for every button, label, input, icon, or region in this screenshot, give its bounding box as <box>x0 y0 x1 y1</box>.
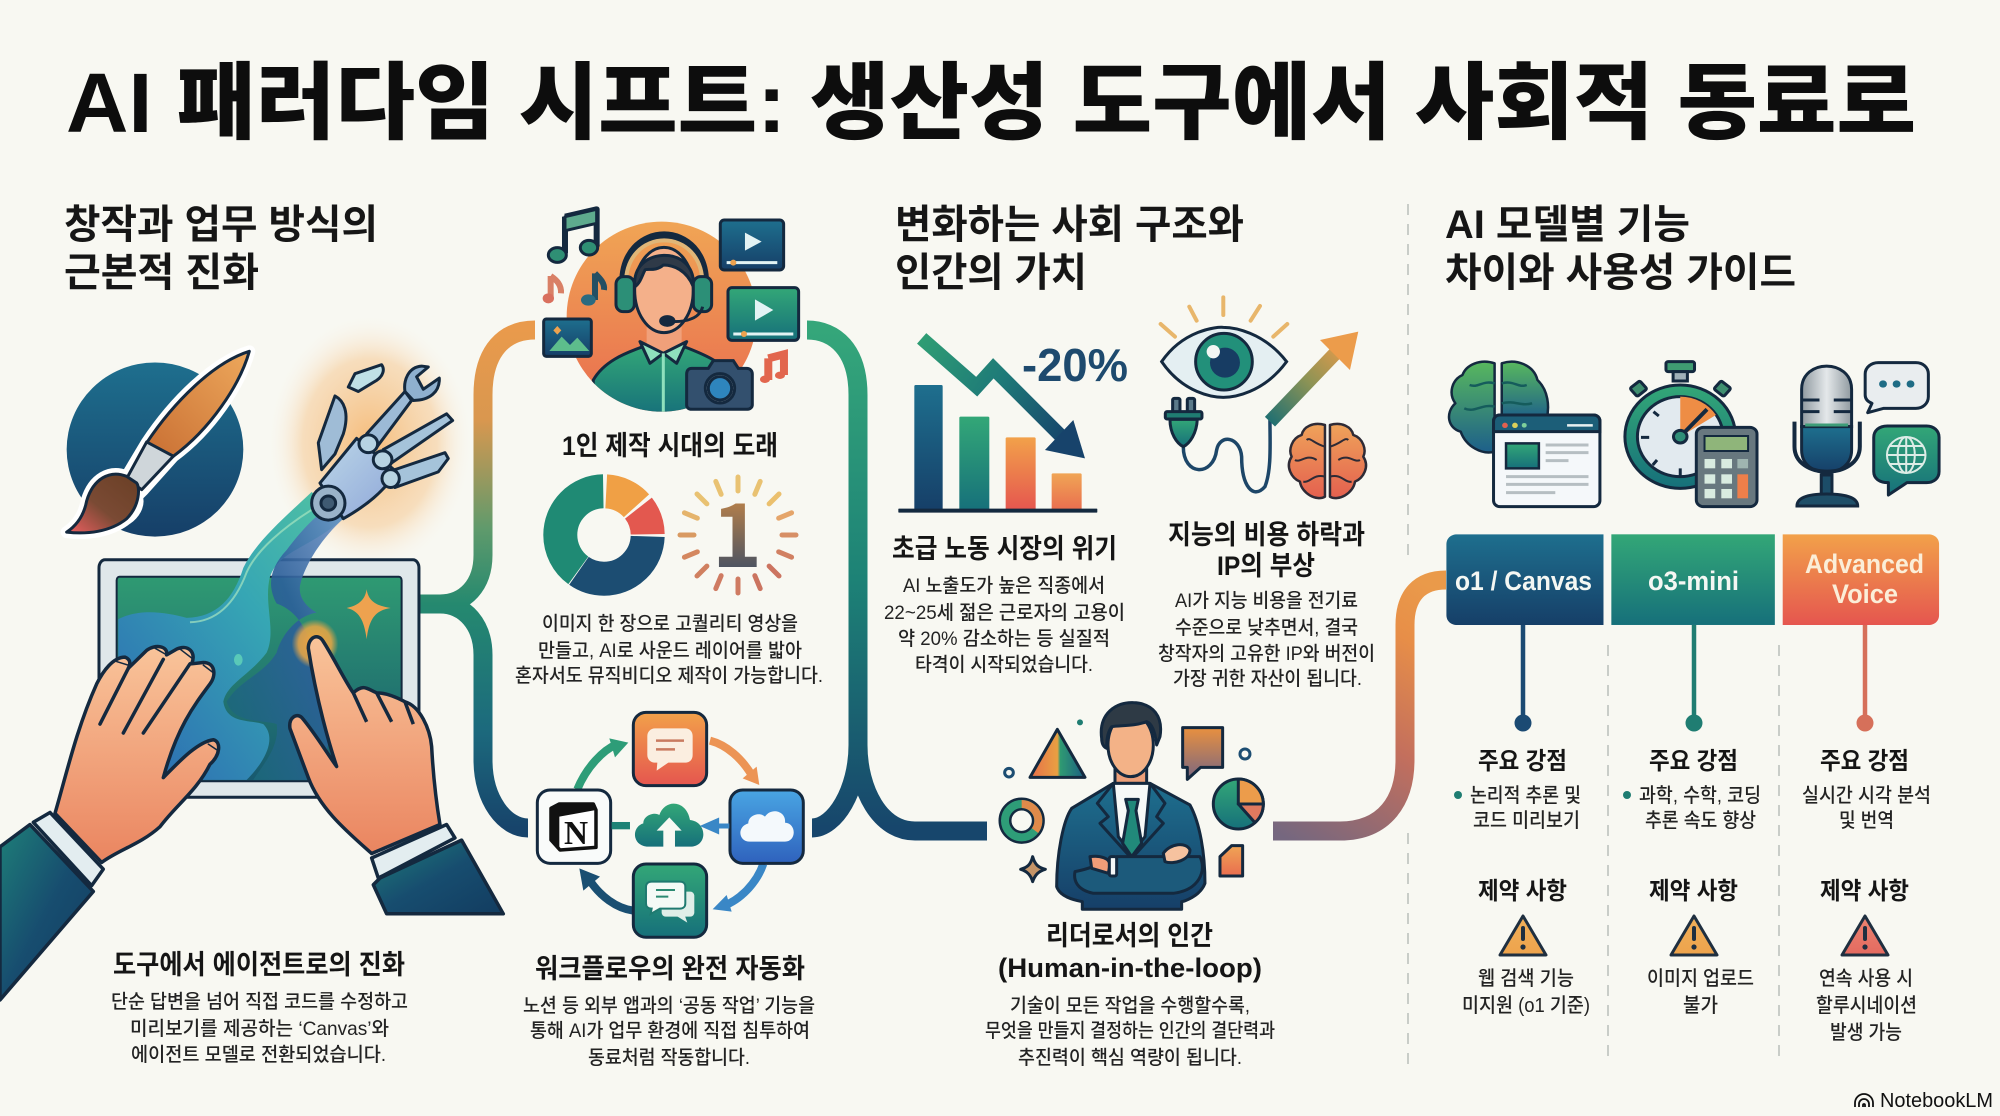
body text <box>985 995 1275 1069</box>
picture tile <box>544 319 591 356</box>
icon: green brain and browser window <box>1449 362 1600 507</box>
diamond <box>1021 857 1045 882</box>
body text: 기술이 모든 작업을 수행할수록, <box>1010 995 1250 1017</box>
strengths text <box>1802 784 1931 832</box>
subheading: 초급 노동 시장의 위기 <box>892 534 1117 564</box>
body text: solo creator <box>515 613 823 687</box>
body text: 단순 답변을 넘어 직접 코드를 수정하고 <box>111 991 408 1013</box>
limits text: 불가 <box>1683 994 1718 1017</box>
man <box>1057 703 1205 909</box>
limits text: 이미지 업로드 <box>1647 967 1754 990</box>
glow behind robot hand <box>267 313 473 572</box>
touch glow <box>292 619 338 668</box>
o1 canvas box <box>1446 534 1603 625</box>
limits text <box>1462 967 1590 1017</box>
body text: 22~25세 젊은 근로자의 고용이 <box>884 602 1125 624</box>
notebooklm logo: NotebookLM <box>1880 1090 1993 1112</box>
tablet <box>99 560 419 797</box>
left hand <box>0 647 219 1000</box>
heading: creation and work: 창작과 업무 방식의 <box>64 203 378 247</box>
illustration: human leader <box>1005 703 1263 909</box>
body text: 가장 귀한 자산이 됩니다. <box>1173 668 1362 690</box>
limits text: 미지원 (o1 기준) <box>1462 994 1590 1017</box>
icons and model header row <box>1446 362 1939 625</box>
subheading: 도구에서 에이전트로의 진화 <box>113 950 405 980</box>
strengths text: 및 번역 <box>1839 809 1894 832</box>
minus twenty percent: -20% <box>1022 339 1128 391</box>
subheading: 워크플로우의 완전 자동화 <box>535 954 805 984</box>
advanced voice box <box>1783 534 1939 625</box>
right hand <box>290 637 503 914</box>
number one burst <box>680 467 796 593</box>
strengths text: 과학, 수학, 코딩 <box>1639 784 1761 807</box>
heading: model guide: 차이와 사용성 가이드 <box>1445 251 1796 295</box>
falling arrow <box>922 338 1062 437</box>
body text: solo creator: 만들고, AI로 사운드 레이어를 밟아 <box>538 640 802 662</box>
triangle <box>1030 729 1085 777</box>
subheading <box>998 921 1262 983</box>
icon: microphone with speech bubbles <box>1794 363 1939 506</box>
ring <box>1005 804 1038 837</box>
body text: 동료처럼 작동합니다. <box>588 1047 750 1069</box>
tag shape <box>1220 846 1243 876</box>
body text: AI 노출도가 높은 직종에서 <box>903 575 1105 597</box>
column: o1 canvas <box>1454 748 1590 1017</box>
subheading: (Human-in-the-loop) <box>998 953 1262 983</box>
strengths text: 논리적 추론 및 <box>1470 784 1581 807</box>
strengths text <box>1639 784 1761 832</box>
body text <box>884 575 1125 676</box>
text: entry level job crisis <box>884 534 1125 676</box>
cable and growth arrow <box>1183 420 1270 492</box>
orange circle <box>567 222 757 412</box>
label: advanced voice: Advanced <box>1805 549 1924 579</box>
flow connectors <box>418 330 1446 831</box>
label: advanced voice <box>1805 549 1924 609</box>
stems and dots <box>1514 625 1874 732</box>
body text: AI가 지능 비용을 전기료 <box>1175 590 1358 612</box>
strengths heading: 주요 강점 <box>1649 748 1738 775</box>
messages tile <box>633 864 707 937</box>
limits heading: 제약 사항 <box>1649 878 1738 905</box>
arrow from cloud tile <box>706 821 729 831</box>
body text: 통해 AI가 업무 환경에 직접 침투하여 <box>530 1020 810 1042</box>
body text <box>111 991 408 1066</box>
brain <box>1289 424 1366 498</box>
icon: blue circle <box>67 362 243 537</box>
center cloud upload <box>635 804 703 847</box>
notion tile <box>537 790 611 863</box>
strengths text: 실시간 시각 분석 <box>1802 784 1931 807</box>
body text: 창작자의 고유한 IP와 버전이 <box>1158 643 1375 665</box>
subheading <box>1168 520 1365 581</box>
body text: solo creator: 혼자서도 뮤직비디오 제작이 가능합니다. <box>515 665 823 687</box>
o3-mini box <box>1611 534 1775 625</box>
heading: model guide <box>1445 203 1796 295</box>
person <box>592 326 716 412</box>
music notes <box>548 209 598 262</box>
illustration: brush, robot hand, tablet <box>0 313 503 1000</box>
notion tile: N <box>564 815 588 852</box>
camera <box>687 361 752 409</box>
rays <box>1161 297 1287 337</box>
star <box>347 589 391 639</box>
subheading: IP의 부상 <box>1217 551 1315 581</box>
subheading: 지능의 비용 하락과 <box>1168 520 1365 550</box>
title: AI 패러다임 시프트: 생산성 도구에서 사회적 동료로 <box>66 56 1916 150</box>
limits text: 웹 검색 기능 <box>1478 967 1574 990</box>
limits text: 연속 사용 시 <box>1819 967 1913 990</box>
bullet <box>1454 791 1462 799</box>
number one burst: 1 <box>712 467 762 592</box>
limits text: 발생 가능 <box>1830 1021 1902 1044</box>
bar chart with falling arrow <box>898 338 1097 513</box>
plug <box>1165 398 1202 447</box>
chat tile <box>633 712 707 786</box>
pie chart <box>1213 779 1263 829</box>
strengths text: 코드 미리보기 <box>1473 809 1580 832</box>
body text <box>1158 590 1375 690</box>
limits heading: 제약 사항 <box>1820 878 1909 905</box>
heading: social change: 변화하는 사회 구조와 <box>895 203 1244 247</box>
body text: 미리보기를 제공하는 ‘Canvas’와 <box>130 1018 389 1040</box>
limits heading: 제약 사항 <box>1478 878 1567 905</box>
speech square <box>1183 728 1223 779</box>
video tile 1 <box>720 220 784 270</box>
strengths text <box>1470 784 1581 832</box>
body text: 추진력이 핵심 역량이 됩니다. <box>1018 1047 1242 1069</box>
label: o1 canvas: o1 / Canvas <box>1455 566 1592 596</box>
body text: 에이전트 모델로 전환되었습니다. <box>131 1044 386 1066</box>
text: cost of intelligence <box>1158 520 1375 690</box>
limits text <box>1816 967 1917 1044</box>
heading: social change: 인간의 가치 <box>895 251 1087 295</box>
body text: 타격이 시작되었습니다. <box>915 654 1093 676</box>
text: tool to agent <box>111 950 408 1066</box>
icon: warning <box>1671 916 1717 955</box>
illustration: workflow cycle <box>537 712 803 937</box>
icon: warning <box>1842 916 1888 955</box>
label: o3-mini: o3-mini <box>1648 566 1739 596</box>
body text <box>523 995 815 1069</box>
text: human in the loop <box>985 921 1275 1069</box>
illustration: solo creator <box>543 209 799 417</box>
label: advanced voice: Voice <box>1832 579 1898 609</box>
subheading: 리더로서의 인간 <box>1046 921 1213 951</box>
robot hand <box>312 365 453 520</box>
video tile 2 <box>728 288 799 340</box>
icon: warning <box>1500 916 1546 955</box>
small dots <box>1005 719 1250 777</box>
column: o3-mini <box>1623 748 1761 1017</box>
arrows <box>577 741 763 911</box>
strengths heading: 주요 강점 <box>1478 748 1567 775</box>
heading: model guide: AI 모델별 기능 <box>1445 203 1690 247</box>
body text: solo creator: 이미지 한 장으로 고퀄리티 영상을 <box>542 613 798 635</box>
donut chart <box>560 491 648 579</box>
heading: creation and work: 근본적 진화 <box>64 251 259 295</box>
limits text: 할루시네이션 <box>1816 994 1917 1017</box>
body text: 약 20% 감소하는 등 실질적 <box>898 628 1110 650</box>
dark stream <box>227 508 343 780</box>
link bar <box>612 822 630 829</box>
heading: social change <box>895 203 1244 295</box>
bullet <box>1623 791 1631 799</box>
text: workflow automation <box>523 954 815 1069</box>
strengths text: 추론 속도 향상 <box>1645 809 1756 832</box>
strengths heading: 주요 강점 <box>1820 748 1909 775</box>
body text: 무엇을 만들지 결정하는 인간의 결단력과 <box>985 1020 1275 1042</box>
limits text <box>1647 967 1754 1017</box>
icon: paint brush <box>67 351 249 533</box>
heading: creation and work <box>64 203 378 295</box>
body text: 노션 등 외부 앱과의 ‘공동 작업’ 기능을 <box>523 995 815 1017</box>
column dividers <box>1408 204 1779 1067</box>
column: advanced voice <box>1802 748 1931 1044</box>
subheading: solo creator: 1인 제작 시대의 도래 <box>562 431 778 461</box>
cloud tile <box>730 790 803 863</box>
eye <box>1162 327 1287 397</box>
body text: 수준으로 낮추면서, 결국 <box>1175 617 1358 639</box>
illustration: eye, plug, brain <box>1161 297 1366 498</box>
liquid flow <box>118 492 343 780</box>
icon: stopwatch and calculator <box>1625 362 1757 507</box>
